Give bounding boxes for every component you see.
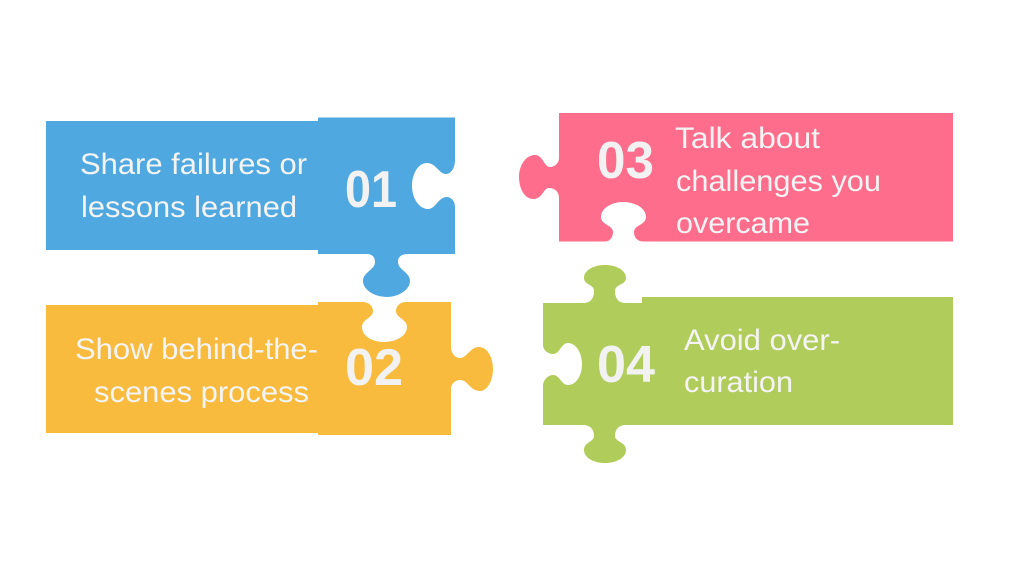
text: talk about challenges [675,122,881,240]
text: talk about challenges: challenges you [676,165,881,198]
panel: puzzle piece 04 [543,265,953,463]
text: talk about challenges: overcame [676,207,810,240]
number: 04: 04 [597,336,655,394]
number: 02: 02 [345,339,403,397]
panel: puzzle piece 02 [46,302,493,435]
text: share failures [80,148,307,224]
panel: puzzle piece 01 [46,118,455,297]
shape: pink puzzle piece [519,113,953,242]
number: 01: 01 [345,161,397,219]
text: share failures: lessons learned [81,191,297,224]
shape: orange puzzle piece [46,302,493,435]
text: show behind-the-scenes: Show behind-the- [75,333,318,366]
shape: blue puzzle piece [46,118,455,297]
text: talk about challenges: Talk about [675,122,821,155]
shape: green puzzle piece [543,265,953,463]
text: avoid over-curation: curation [684,366,793,399]
text: avoid over-curation: Avoid over- [684,324,840,357]
text: avoid over-curation [684,324,840,399]
panel: puzzle piece 03 [519,113,953,242]
text: show behind-the-scenes [75,333,318,409]
text: share failures: Share failures or [80,148,307,181]
number: 03: 03 [597,132,654,190]
text: show behind-the-scenes: scenes process [94,376,309,409]
